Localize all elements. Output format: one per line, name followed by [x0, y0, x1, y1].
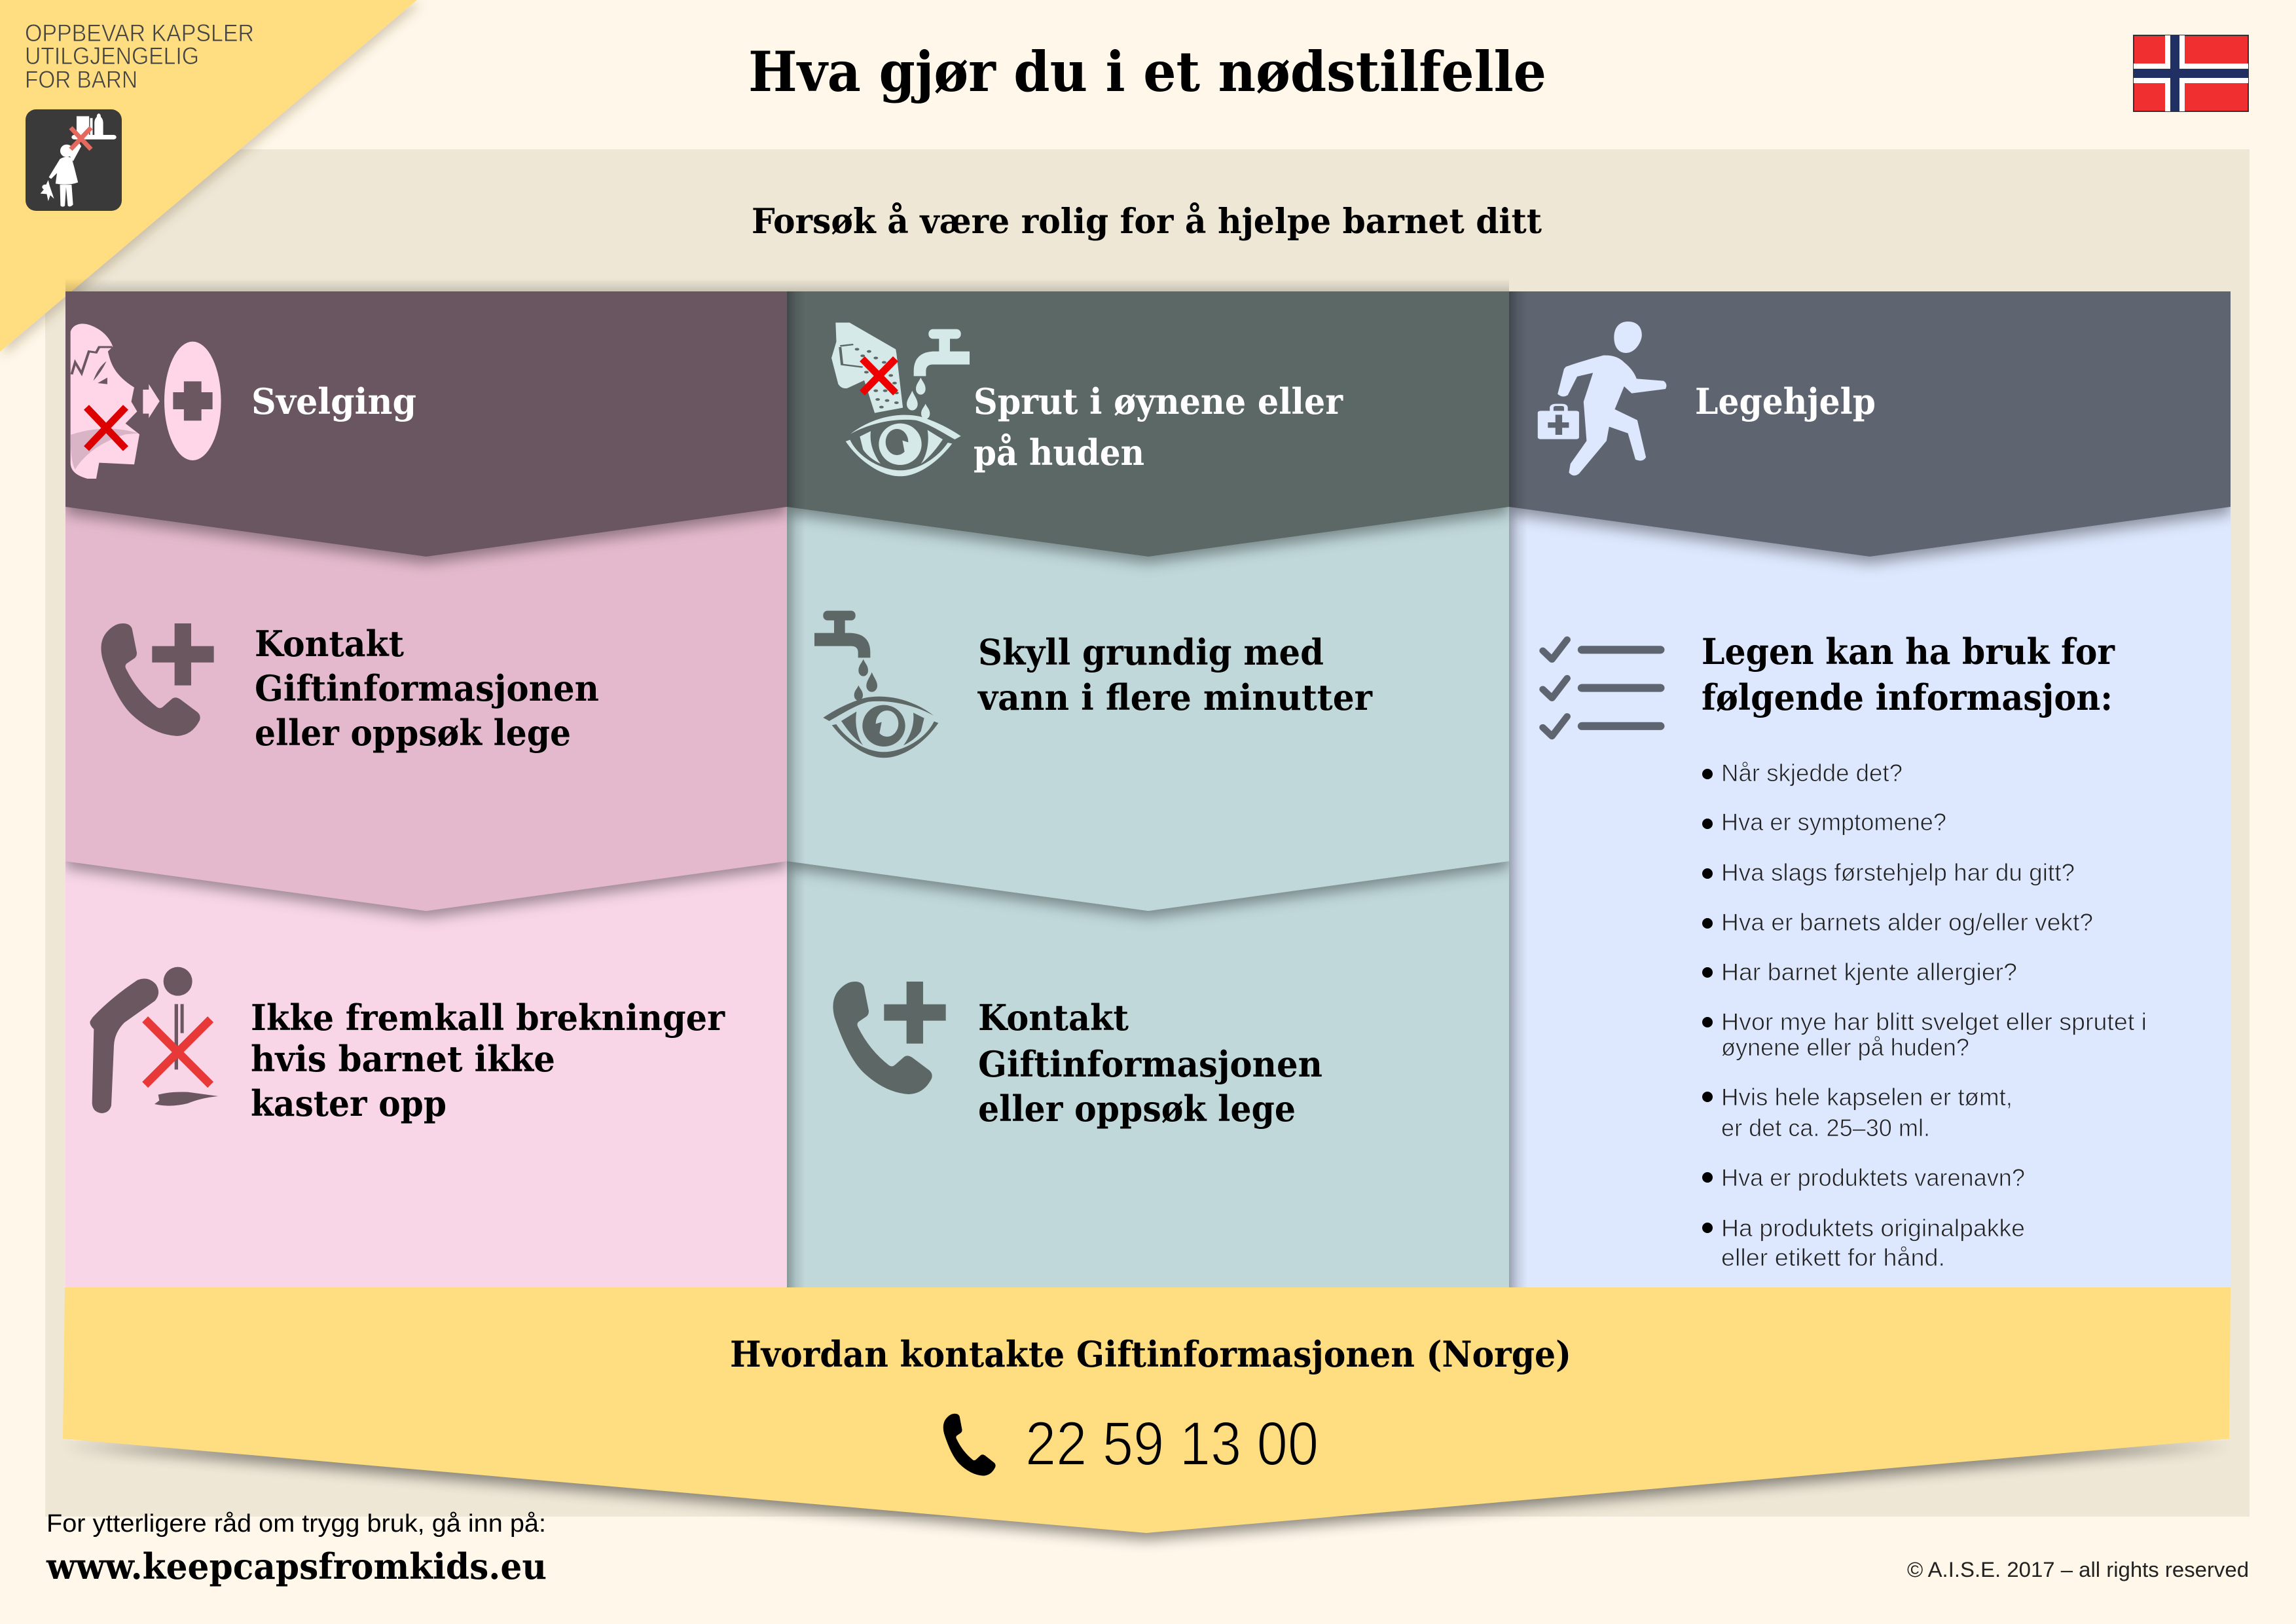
bullet list: questions: Når skjedde det? — [1721, 760, 1903, 786]
text: do not induce vomiting: hvis barnet ikke — [251, 1038, 555, 1080]
chevron: rinse step — [787, 861, 1509, 926]
text: contact poison information — [255, 623, 599, 754]
text: contact poison information: eller oppsøk lege — [255, 712, 571, 754]
header: Legehjelp — [1509, 291, 2231, 557]
heading: information for doctor: Legen kan ha bruk for — [1702, 631, 2115, 673]
icon: do not induce vomiting — [90, 967, 218, 1113]
icon: capsule spray with tap and eye — [831, 323, 970, 476]
icon: phone with plus — [833, 982, 946, 1094]
panel: column 3, doctor's help — [1509, 291, 2231, 1287]
title: Hva gjør du i et nødstilfelle — [748, 39, 1546, 104]
header: swallowing — [65, 291, 787, 557]
bullet list: questions: øynene eller på huden? — [1721, 1034, 1969, 1061]
icon: running person with medical bag — [1538, 322, 1666, 475]
bullet list: questions — [1702, 760, 2147, 1271]
panel: column 1, swallowing — [65, 291, 787, 1287]
bullet list: questions: Hva slags førstehjelp har du gitt? — [1721, 859, 2075, 886]
text: do not induce vomiting: kaster opp — [251, 1082, 446, 1124]
bullet list: questions: Har barnet kjente allergier? — [1721, 959, 2017, 986]
text: rinse thoroughly: Skyll grundig med — [978, 631, 1324, 673]
icon: tap rinsing eye — [814, 611, 938, 758]
bullet list: questions: Hva er symptomene? — [1721, 809, 1946, 836]
text: rinse thoroughly: vann i flere minutter — [977, 676, 1373, 718]
subtitle: Forsøk å være rolig for å hjelpe barnet ditt — [752, 202, 1542, 242]
text: do not induce vomiting: Ikke fremkall brekninger — [251, 997, 725, 1039]
heading: Legehjelp: Legehjelp — [1695, 380, 1876, 422]
text: contact poison information: Kontakt — [978, 997, 1129, 1039]
bullet list: questions: Hva er barnets alder og/eller vekt? — [1721, 909, 2093, 936]
bullet list: questions: Hvor mye har blitt svelget eller sprutet i — [1721, 1008, 2147, 1035]
bullet list: questions: er det ca. 25–30 ml. — [1721, 1115, 1930, 1141]
phone number: 22 59 13 00 — [1025, 1409, 1319, 1479]
heading: swallowing: Svelging — [251, 380, 416, 422]
icon: telephone — [943, 1414, 996, 1476]
panel: how to contact banner — [63, 1287, 2231, 1540]
text: rinse thoroughly — [977, 631, 1373, 718]
footer text: further advice: For ytterligere råd om trygg bruk, gå inn på: — [46, 1510, 546, 1538]
text: do not induce vomiting — [251, 997, 725, 1124]
text: contact poison information: Kontakt — [255, 623, 404, 665]
footer link: www.keepcapsfromkids.eu — [46, 1545, 547, 1587]
heading: splash: Sprut i øynene eller — [974, 380, 1343, 422]
bullet list: questions: Hvis hele kapselen er tømt, — [1721, 1084, 2013, 1111]
heading: splash: på huden — [974, 432, 1144, 473]
icon: Norwegian flag — [2134, 35, 2248, 111]
heading: information for doctor: følgende informasjon: — [1702, 676, 2113, 718]
bullet list: questions: Ha produktets originalpakke — [1721, 1215, 2025, 1242]
icon: checklist — [1542, 640, 1660, 736]
warning text: keep capsules out of reach: OPPBEVAR KAPSLER — [25, 20, 254, 46]
copyright: © A.I.S.E. 2017 – all rights reserved — [1907, 1558, 2249, 1581]
panel: column 2, splash in eyes or on skin — [787, 291, 1509, 1287]
text: contact poison information: Giftinformasjonen — [255, 667, 599, 709]
icon: face, arrow and medical cross — [71, 323, 221, 479]
warning text: keep capsules out of reach: UTILGJENGELIG — [25, 43, 199, 69]
bullet list: questions: eller etikett for hånd. — [1721, 1244, 1945, 1271]
heading: how to contact: Hvordan kontakte Giftinformasjonen (Norge) — [730, 1333, 1571, 1375]
yellow corner triangle — [0, 0, 417, 352]
warning text: keep capsules out of reach — [25, 20, 254, 93]
icon: phone with plus — [101, 623, 214, 736]
text: contact poison information: eller oppsøk lege — [978, 1088, 1296, 1130]
icon: child reaching for shelf — [26, 109, 122, 211]
chevron: contact step — [65, 507, 787, 911]
text: contact poison information: Giftinformasjonen — [978, 1043, 1322, 1085]
heading: information for doctor — [1702, 631, 2115, 718]
heading: splash — [974, 380, 1343, 473]
text: contact poison information — [978, 997, 1322, 1130]
bullet list: questions: Hva er produktets varenavn? — [1721, 1164, 2025, 1191]
warning text: keep capsules out of reach: FOR BARN — [25, 66, 137, 93]
header: splash — [787, 291, 1509, 557]
